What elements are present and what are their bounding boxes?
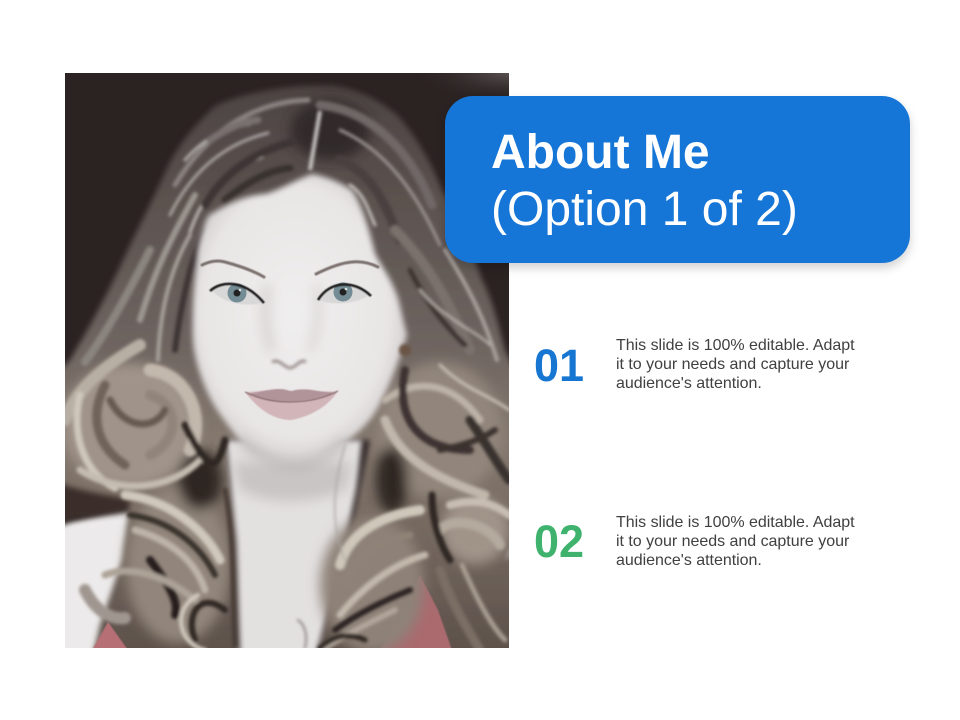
skin: shoulders <box>40 508 530 660</box>
face shading <box>240 285 345 464</box>
photo background <box>65 73 509 648</box>
dark hair under layer <box>40 480 150 530</box>
title subheading: (Option 1 of 2) <box>491 183 798 236</box>
title card <box>445 96 910 263</box>
dress <box>92 575 452 650</box>
text block 2: audience's attention. <box>616 552 762 569</box>
text block 2: This slide is 100% editable. Adapt <box>616 514 855 531</box>
curl body tones <box>62 100 509 653</box>
neck and chest <box>226 440 362 655</box>
lips <box>245 389 338 420</box>
portrait photo <box>65 73 509 648</box>
right curls <box>298 365 509 650</box>
eyebrows <box>202 261 378 277</box>
number 02: 02 <box>534 516 584 567</box>
text block 1: This slide is 100% editable. Adapt <box>616 337 855 354</box>
text block 2: it to your needs and capture your <box>616 533 849 550</box>
left curls <box>65 345 235 650</box>
hair part <box>310 111 320 170</box>
text block 2 <box>616 514 855 569</box>
text block 1: it to your needs and capture your <box>616 356 849 373</box>
eye right <box>318 282 371 303</box>
eye left <box>210 284 264 305</box>
hair mass <box>50 86 530 660</box>
title heading: About Me <box>491 126 710 179</box>
text block 1 <box>616 337 855 392</box>
text block 1: audience's attention. <box>616 375 762 392</box>
top hair strands <box>85 100 497 362</box>
nose <box>272 361 306 368</box>
face <box>193 174 407 462</box>
earring <box>399 344 411 356</box>
number 01: 01 <box>534 340 584 391</box>
